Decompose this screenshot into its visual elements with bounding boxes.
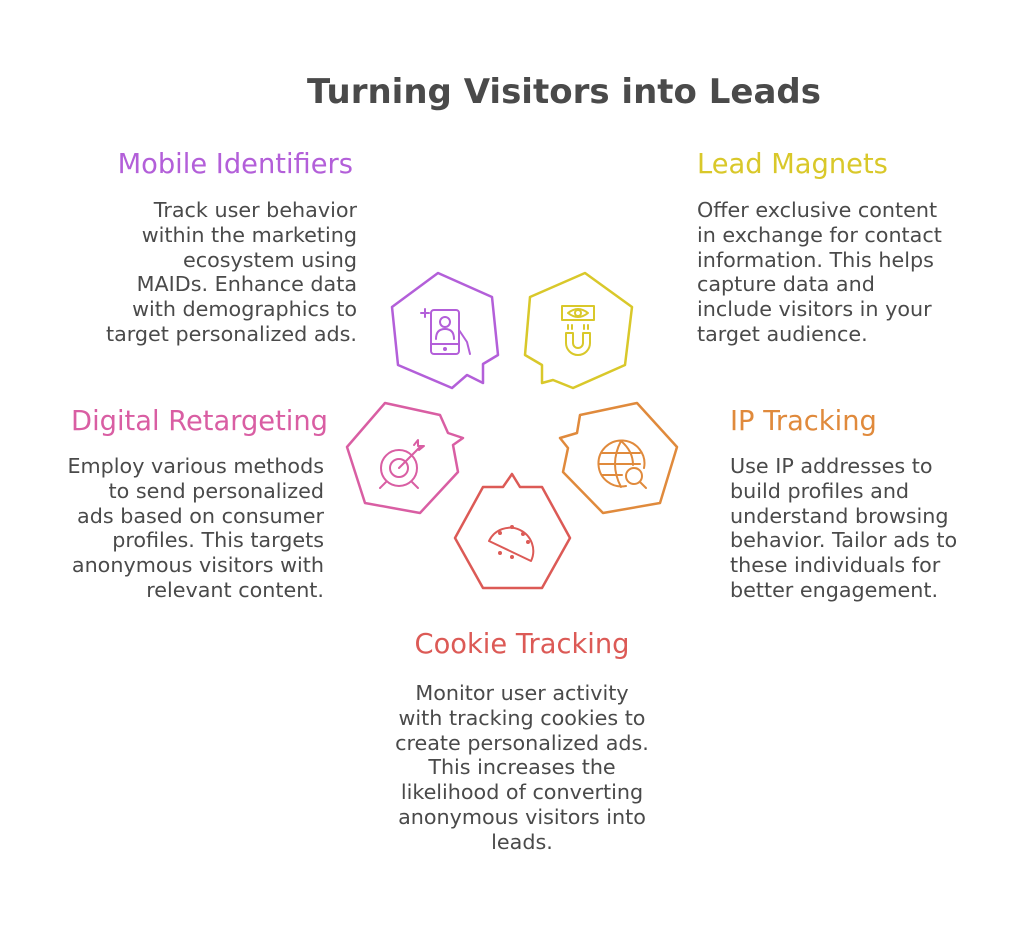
text: Digital Retargeting: ads based on consumer <box>77 504 324 528</box>
text: Mobile Identifiers: MAIDs. Enhance data <box>137 272 357 296</box>
title: Turning Visitors into Leads <box>307 72 821 112</box>
heading: Mobile Identifiers: Mobile Identifiers <box>118 149 353 180</box>
icon: phone with hand <box>421 309 470 354</box>
heading: Cookie Tracking: Cookie Tracking <box>415 629 629 660</box>
text: Mobile Identifiers <box>106 198 357 346</box>
hexagon: cookie tracking <box>455 474 570 588</box>
text: Mobile Identifiers: within the marketing <box>142 223 357 247</box>
text: IP Tracking: better engagement. <box>730 578 938 602</box>
text: Digital Retargeting: Employ various methods <box>67 454 324 478</box>
text: Mobile Identifiers: ecosystem using <box>183 248 357 272</box>
heading: Lead Magnets: Lead Magnets <box>697 149 888 180</box>
text: Lead Magnets <box>697 198 942 346</box>
text: IP Tracking: these individuals for <box>730 553 940 577</box>
text: Mobile Identifiers: with demographics to <box>132 297 357 321</box>
text: Mobile Identifiers: target personalized ads. <box>106 322 357 346</box>
text: Digital Retargeting: relevant content. <box>146 578 324 602</box>
text: Cookie Tracking: likelihood of converting <box>401 780 643 804</box>
text: IP Tracking: behavior. Tailor ads to <box>730 528 957 552</box>
text: Lead Magnets: include visitors in your <box>697 297 932 321</box>
text: Cookie Tracking <box>395 681 649 854</box>
text: Lead Magnets: information. This helps <box>697 248 934 272</box>
text: Cookie Tracking: anonymous visitors into <box>398 805 646 829</box>
text: IP Tracking: build profiles and <box>730 479 909 503</box>
heading: Digital Retargeting: Digital Retargeting <box>71 406 328 437</box>
text: Cookie Tracking: Monitor user activity <box>415 681 629 705</box>
text: Cookie Tracking: This increases the <box>428 755 616 779</box>
icon: globe search <box>598 440 646 488</box>
text: Digital Retargeting: anonymous visitors with <box>72 553 324 577</box>
text: Cookie Tracking: leads. <box>491 830 553 854</box>
icon: target <box>380 440 424 488</box>
text: IP Tracking: understand browsing <box>730 504 949 528</box>
text: Lead Magnets: in exchange for contact <box>697 223 942 247</box>
text: Lead Magnets: capture data and <box>697 272 875 296</box>
hexagon: ip tracking <box>560 403 677 513</box>
text: Cookie Tracking: with tracking cookies to <box>399 706 645 730</box>
hexagon: lead magnets <box>525 273 632 388</box>
hexagon: mobile identifiers <box>392 273 498 388</box>
text: Lead Magnets: Offer exclusive content <box>697 198 937 222</box>
hexagon: digital retargeting <box>347 403 463 513</box>
heading: IP Tracking: IP Tracking <box>730 406 877 437</box>
text: Digital Retargeting <box>67 454 324 602</box>
text: Lead Magnets: target audience. <box>697 322 868 346</box>
text: IP Tracking: Use IP addresses to <box>730 454 933 478</box>
text: IP Tracking <box>730 454 957 602</box>
text: Digital Retargeting: to send personalized <box>109 479 324 503</box>
text: Cookie Tracking: create personalized ads. <box>395 731 649 755</box>
text: Mobile Identifiers: Track user behavior <box>154 198 357 222</box>
icon: money magnet <box>562 306 594 355</box>
icon: cookie <box>489 526 533 561</box>
text: Digital Retargeting: profiles. This targets <box>112 528 324 552</box>
